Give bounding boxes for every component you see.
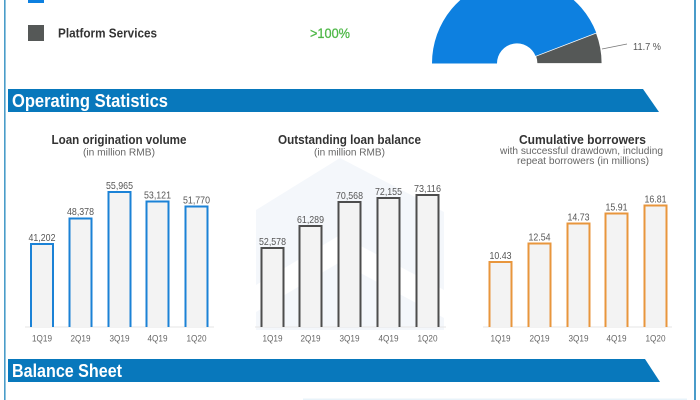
values [28, 180, 210, 244]
quarter labels: 4Q19 [378, 334, 398, 344]
quarter labels: 1Q19 [490, 334, 510, 344]
heading: balance sheet [8, 359, 660, 382]
values: 10.43 [490, 250, 512, 262]
values: 72,155 [375, 186, 402, 198]
chart subtitle: with successful drawdown, including [499, 146, 663, 157]
chart title: Cumulative borrowers [519, 133, 646, 147]
quarter labels [490, 334, 666, 344]
values [490, 194, 667, 262]
chart title: Loan origination volume [52, 133, 187, 147]
values: 15.91 [606, 202, 628, 214]
quarter labels: 2Q19 [70, 334, 90, 344]
legend value: platform services growth: >100% [310, 25, 350, 41]
legend swatch: platform services [28, 25, 44, 41]
background watermark [256, 158, 444, 330]
chart subtitle [499, 146, 663, 167]
chart subtitle: (in million RMB) [83, 148, 155, 158]
quarter labels: 2Q19 [300, 334, 320, 344]
values: 55,965 [106, 180, 133, 192]
quarter labels: 4Q19 [606, 334, 626, 344]
chart subtitle: (in million RMB) [314, 148, 385, 158]
chart: loan origination volume [25, 133, 214, 344]
bars [490, 206, 666, 327]
leader line [602, 44, 627, 49]
values: 14.73 [568, 212, 590, 224]
values: 48,378 [67, 206, 94, 218]
quarter labels: 3Q19 [568, 334, 588, 344]
values: 61,289 [297, 214, 324, 226]
values: 53,121 [144, 190, 171, 202]
values: 16.81 [644, 194, 667, 206]
chart: outstanding loan balance [255, 133, 446, 344]
heading: operating statistics: Operating Statistics [12, 91, 168, 111]
quarter labels: 3Q19 [340, 334, 360, 344]
quarter labels [32, 334, 206, 344]
values: 73,116 [414, 183, 441, 195]
heading: operating statistics [8, 89, 659, 112]
quarter labels: 3Q19 [110, 334, 130, 344]
legend label: platform services: Platform Services [58, 26, 157, 40]
bars [31, 192, 208, 327]
values: 52,578 [259, 236, 286, 248]
values: 70,568 [336, 190, 363, 202]
donut label: 11.7 % [633, 42, 661, 53]
quarter labels: 1Q19 [32, 334, 52, 344]
heading: balance sheet: Balance Sheet [12, 361, 122, 381]
bars [262, 195, 438, 327]
values [259, 183, 441, 248]
quarter labels: 1Q20 [186, 334, 206, 344]
quarter labels: 1Q19 [262, 334, 282, 344]
legend: revenue categories [28, 0, 350, 41]
values: 41,202 [28, 232, 56, 244]
quarter labels: 4Q19 [148, 334, 168, 344]
values: 12.54 [528, 232, 551, 244]
values: 51,770 [183, 194, 210, 206]
donut segment: blue share [432, 0, 596, 64]
quarter labels: 1Q20 [646, 334, 666, 344]
panel: balance sheet table top edge [303, 398, 687, 400]
quarter labels: 2Q19 [530, 334, 550, 344]
chart: cumulative borrowers [483, 133, 672, 344]
quarter labels: 1Q20 [418, 334, 438, 344]
donut segment: platform services share [536, 33, 602, 64]
legend swatch: clipped blue [28, 0, 44, 3]
semi-donut chart [432, 0, 661, 64]
quarter labels [262, 334, 438, 344]
chart title: Outstanding loan balance [278, 133, 421, 147]
chart subtitle: repeat borrowers (in millions) [517, 156, 649, 167]
